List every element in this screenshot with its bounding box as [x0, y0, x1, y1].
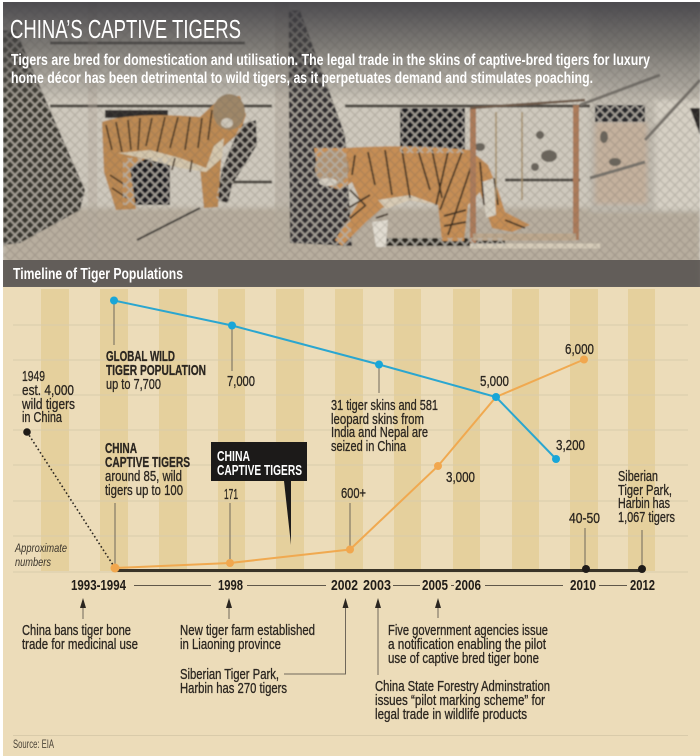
label: 1949: wild tigers [21, 396, 75, 413]
event: 2002: Harbin has 270 tigers [180, 680, 287, 697]
event: 2005-2006: Five government agencies issue [388, 622, 548, 639]
label: 1949 [21, 368, 75, 426]
label: china captive tigers 1993: CAPTIVE TIGERS [105, 454, 190, 471]
label: global wild tiger population: up to 7,700 [106, 376, 161, 393]
line: captive tigers [110, 356, 588, 572]
event: 1993-1994: trade for medicinal use [22, 636, 138, 653]
value labels [224, 341, 600, 527]
timeline axis [115, 565, 646, 573]
timeline years: 2005 [422, 577, 448, 594]
section heading: Timeline of Tiger Populations [13, 266, 183, 283]
value labels: 600+ [341, 485, 366, 502]
timeline years: 2010 [570, 577, 596, 594]
timeline years: 1998 [218, 577, 243, 594]
line: global wild tigers [110, 296, 560, 463]
arrows to events [80, 598, 441, 675]
event: 2005-2006: use of captive bred tiger bone [388, 650, 539, 667]
label: seizure: leopard skins from [331, 411, 424, 428]
event: 1998 [180, 622, 315, 653]
note: approximate numbers: numbers [15, 555, 51, 569]
event: 2003 [375, 678, 550, 723]
label: siberian tiger park 2012: Siberian [618, 468, 658, 485]
event: 1998: in Liaoning province [180, 636, 281, 653]
label: china captive tigers 1993: around 85, wild [105, 468, 182, 485]
label: seizure [331, 397, 438, 455]
timeline years: 2003 [363, 577, 391, 594]
timeline years [71, 577, 655, 594]
value labels: 6,000 [565, 341, 594, 358]
event: 2003: China State Forestry Adminstration [375, 678, 550, 695]
title: CHINA’S CAPTIVE TIGERS [10, 14, 241, 44]
label: 1949: est. 4,000 [22, 382, 74, 399]
event: 2003: legal trade in wildlife products [375, 706, 527, 723]
label: china captive tigers 1993: tigers up to 100 [105, 482, 183, 499]
leader lines [114, 303, 642, 567]
event: 1993-1994 [22, 622, 138, 653]
label: global wild tiger population [106, 348, 206, 393]
photo: caged tigers [3, 2, 700, 288]
value labels: 3,200 [556, 437, 585, 454]
chart background stripes [41, 289, 655, 571]
label: seizure: 31 tiger skins and 581 [331, 397, 438, 414]
value labels: 40-50 [569, 510, 600, 527]
value labels: 171 [224, 486, 238, 503]
event: 2003: issues “pilot marking scheme” for [375, 692, 545, 709]
note: approximate numbers [14, 541, 67, 569]
label: siberian tiger park 2012: Tiger Park, [618, 482, 672, 499]
label: global wild tiger population: TIGER POPULATION [106, 362, 206, 379]
event: 2002 [180, 666, 287, 697]
event: 2002: Siberian Tiger Park, [180, 666, 279, 683]
value labels: 3,000 [446, 469, 475, 486]
label: global wild tiger population: GLOBAL WILD [106, 348, 175, 365]
label: 1949: 1949 [22, 368, 45, 385]
timeline years: 2006 [455, 577, 481, 594]
chain-link fence [3, 40, 700, 260]
event: 1998: New tiger farm established [180, 622, 315, 639]
tiger left [102, 94, 246, 210]
label: siberian tiger park 2012: Harbin has [618, 495, 670, 512]
timeline years: 1993-1994 [71, 577, 127, 594]
callout: china captive tigers [211, 442, 307, 545]
event: 1993-1994: China bans tiger bone [22, 622, 131, 639]
bottom band [3, 260, 700, 287]
label: seizure: India and Nepal are [331, 424, 428, 441]
label: siberian tiger park 2012: 1,067 tigers [618, 509, 675, 526]
label: seizure: seized in China [331, 438, 406, 455]
label: siberian tiger park 2012 [618, 468, 675, 526]
callout: china captive tigers: CHINA [217, 448, 250, 465]
label: china captive tigers 1993: CHINA [105, 440, 137, 457]
label: china captive tigers 1993 [105, 440, 190, 499]
event: 2005-2006 [388, 622, 548, 667]
top shading [3, 2, 700, 102]
1949 dotted line [23, 428, 115, 568]
event: 2005-2006: a notification enabling the pilot [388, 636, 547, 653]
value labels: 7,000 [227, 373, 255, 390]
value labels: 5,000 [480, 373, 509, 390]
timeline years: 2002 [331, 577, 358, 594]
page background [3, 287, 700, 756]
callout: china captive tigers: CAPTIVE TIGERS [217, 462, 302, 479]
tiger right [314, 146, 530, 247]
rusty cage frame [470, 100, 600, 246]
source: Source: EIA [13, 737, 54, 751]
timeline years: 2012 [630, 577, 655, 594]
note: approximate numbers: Approximate [14, 541, 67, 555]
label: 1949: in China [22, 409, 62, 426]
intro text [11, 52, 650, 87]
